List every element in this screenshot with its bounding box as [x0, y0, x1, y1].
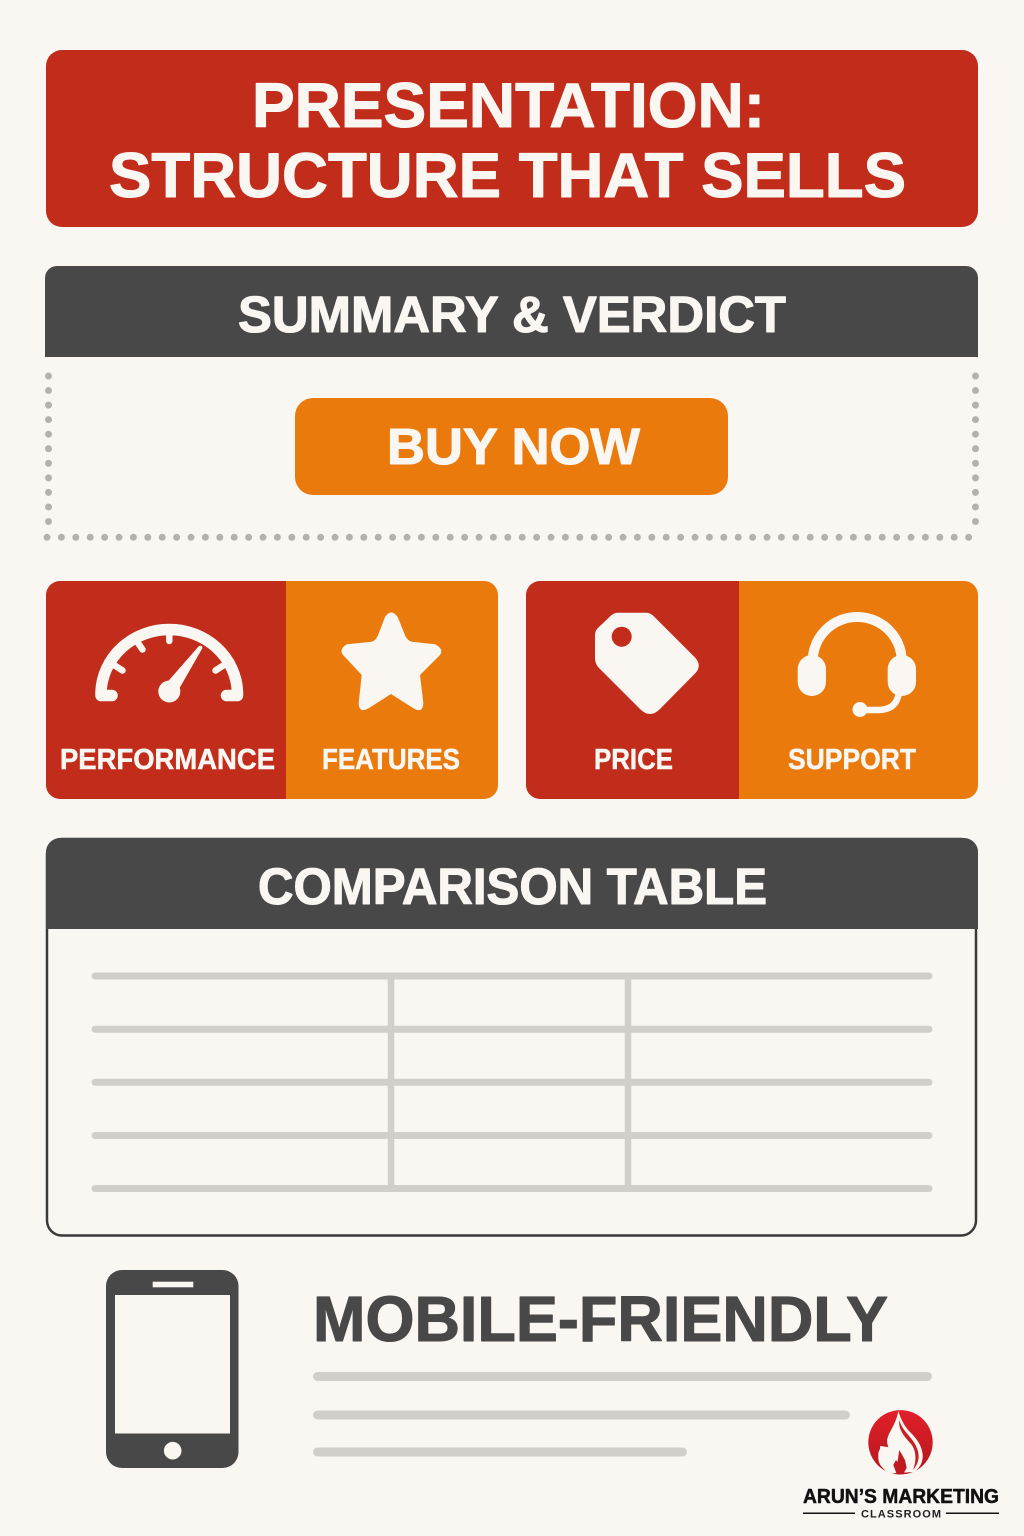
button: buy now: BUY NOW	[387, 418, 641, 475]
section heading: summary and verdict	[45, 266, 978, 357]
section heading: summary and verdict: SUMMARY & VERDICT	[238, 286, 786, 343]
section heading: comparison table	[46, 838, 978, 929]
panel: performance and features	[46, 581, 498, 799]
title banner	[46, 50, 978, 227]
heading: mobile-friendly: MOBILE-FRIENDLY	[313, 1283, 888, 1355]
label: price: PRICE	[594, 744, 673, 776]
title banner: PRESENTATION:	[252, 71, 765, 141]
panel: comparison table	[46, 838, 978, 1236]
logo: Arun's Marketing Classroom	[803, 1410, 999, 1520]
panel: price and support	[526, 581, 978, 799]
text placeholder lines	[313, 1372, 932, 1456]
label: support: SUPPORT	[788, 744, 916, 776]
icon: speedometer gauge	[101, 629, 238, 702]
icon: mobile phone	[106, 1270, 238, 1468]
label: features: FEATURES	[322, 744, 460, 776]
icon: headset	[798, 617, 916, 717]
button: buy now	[295, 398, 728, 495]
label: performance: PERFORMANCE	[60, 744, 275, 776]
title banner: STRUCTURE THAT SELLS	[109, 141, 906, 211]
wordmark: Classroom: CLASSROOM	[861, 1508, 941, 1520]
section heading: comparison table: COMPARISON TABLE	[258, 858, 767, 915]
icon: star	[341, 612, 441, 710]
table grid lines	[95, 976, 929, 1188]
wordmark: Arun's Marketing: ARUN’S MARKETING	[803, 1485, 999, 1508]
panel: summary and verdict	[45, 266, 978, 537]
icon: flame in circle	[868, 1410, 933, 1475]
icon: price tag	[595, 613, 699, 714]
